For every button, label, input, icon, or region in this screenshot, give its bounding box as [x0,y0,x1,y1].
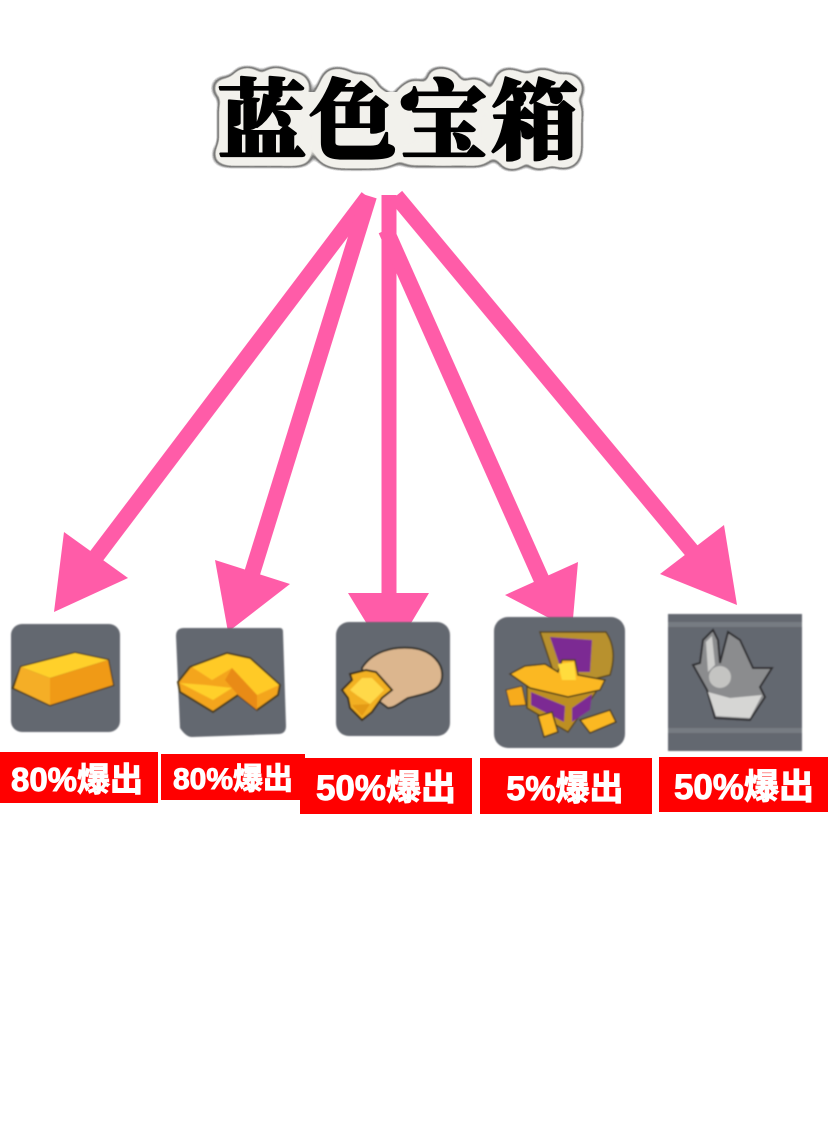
arrow 1 [54,197,368,612]
arrow 2 [215,196,369,632]
drop label: 80% gold bar [0,752,158,803]
drop label: 50% gold bag [300,758,472,814]
reward icon: bag of gold [336,622,450,736]
reward icon: gold bars stack [176,628,286,737]
title: 蓝色宝箱 [218,74,578,171]
drop label: 80% gold stack: 80%爆出 [173,763,293,796]
arrow 5 [396,196,737,605]
drop label: 50% gold bag: 50%爆出 [316,769,456,808]
drop label: 50% helmet [659,757,828,812]
reward icon: silver helmet [668,614,802,751]
drop label: 80% gold stack [161,754,305,800]
drop label: 80% gold bar: 80%爆出 [11,761,143,798]
drop label: 50% helmet: 50%爆出 [674,768,814,807]
reward icon: treasure chest [494,617,625,748]
arrow 3 [348,195,429,660]
reward icon: gold bar [11,624,120,732]
arrow 4 [386,230,578,630]
drop label: 5% treasure chest: 5%爆出 [506,770,624,808]
drop label: 5% treasure chest [480,758,652,814]
arrows from title to rewards [54,195,737,660]
